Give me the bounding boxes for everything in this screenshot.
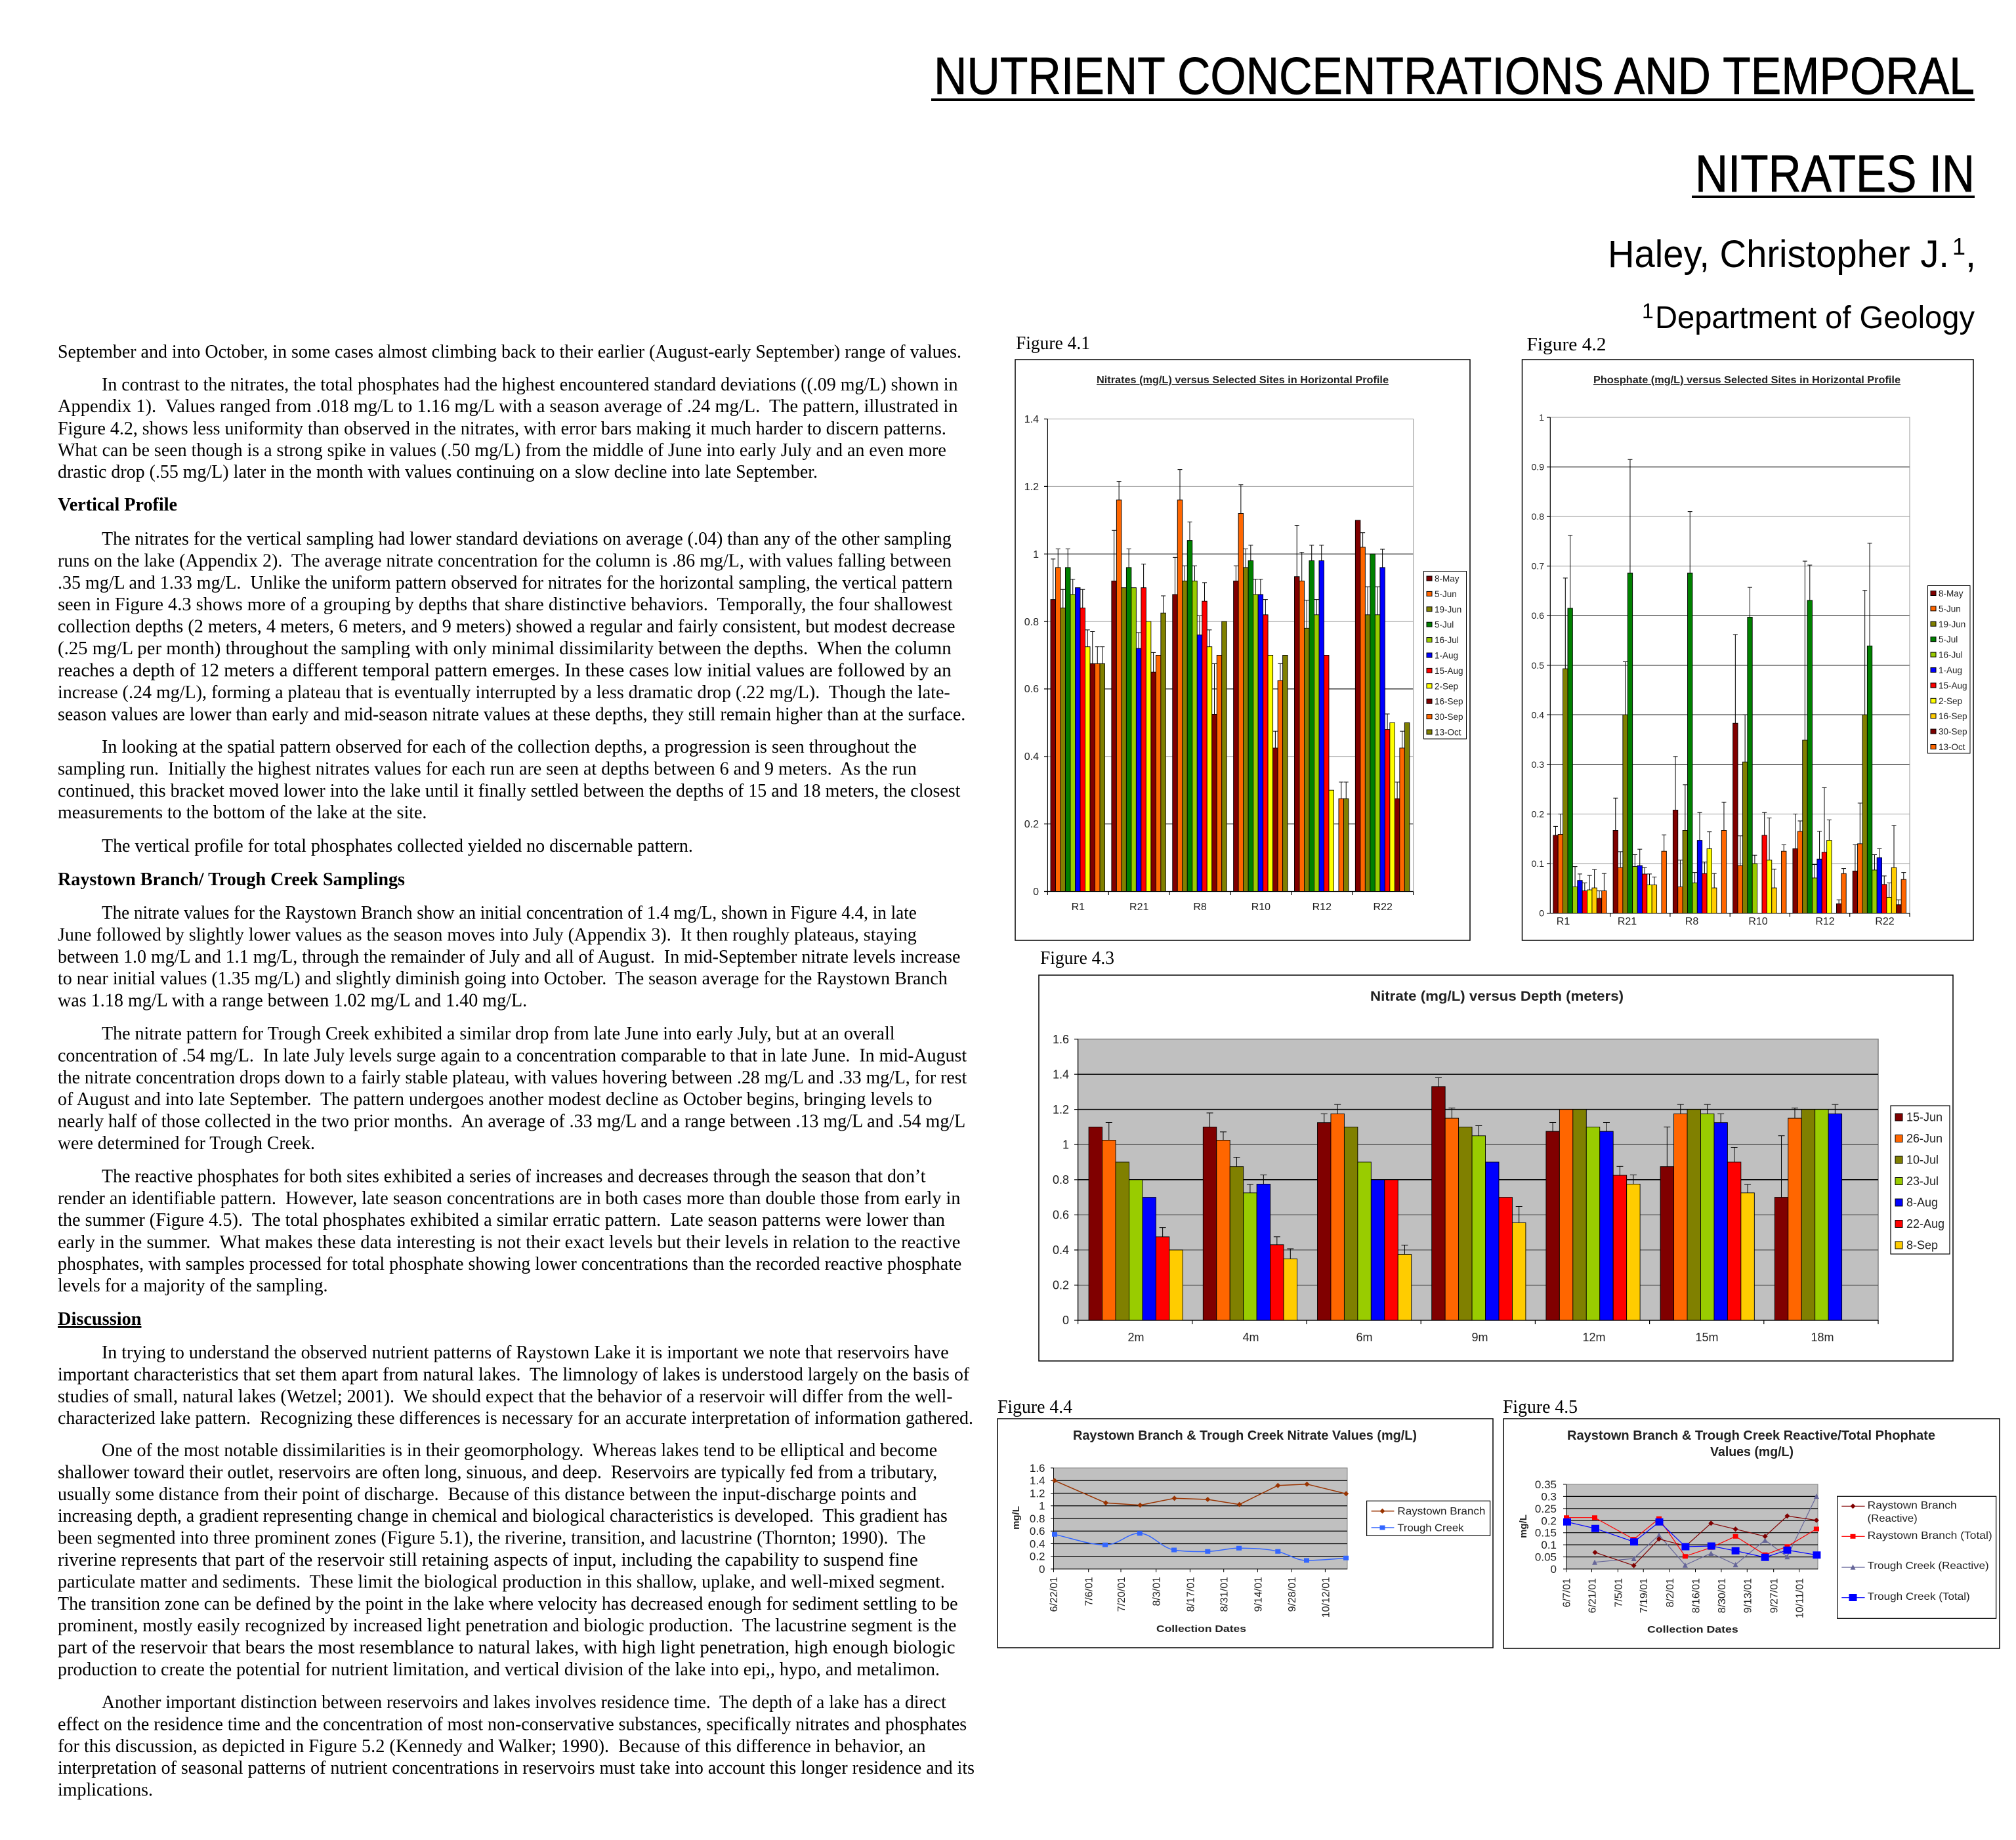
paragraph: total phosphates: What can be seen though is a strong spike in values (.50 mg/L) from the middle of June into early July and an even more: [58, 440, 946, 461]
bars: 18m: [1774, 1104, 1842, 1320]
x axis labels: [1072, 902, 1393, 913]
legend: 2-Sep: [1435, 681, 1458, 691]
paragraph: vertical nitrates: The nitrates for the vertical sampling had lower standard deviations on average (.04) than any of the other sampling: [102, 529, 952, 549]
bars: 6m: [1318, 1104, 1412, 1320]
x axis date labels: 6/7/01: [1562, 1578, 1573, 1607]
plot area and grid: 0.6: [1030, 1525, 1045, 1537]
legend: 16-Jul: [1939, 650, 1963, 660]
x axis labels: R1: [1072, 902, 1085, 913]
line: Raystown Branch reactive: [1592, 1513, 1819, 1568]
figure 4.3 label: Figure 4.3: [1040, 948, 1114, 969]
y axis title: mg/L: [1011, 1506, 1022, 1530]
bars: R1: [1051, 549, 1105, 891]
paragraph: spatial pattern: In looking at the spatial pattern observed for each of the collection depths, a progression is seen throughout the: [102, 737, 917, 757]
paragraph: residence time: Another important distinction between reservoirs and lakes involves residence time. The depth of a lake has a direct: [102, 1692, 946, 1713]
paragraph: reactive phosphates: the summer (Figure 4.5). The total phosphates exhibited a similar erratic pattern. Late season patterns were lower than: [58, 1210, 945, 1230]
x axis date labels: 10/12/01: [1320, 1577, 1332, 1618]
author: ,: [1965, 233, 1976, 276]
bars: R1: [1553, 535, 1606, 913]
legend: 1-Aug: [1939, 665, 1962, 675]
paragraph: vertical nitrates: (.25 mg/L per month) throughout the sampling with only minimal dissimilarity between the depths. When the column: [58, 638, 952, 659]
paragraph: spatial pattern: [58, 737, 961, 823]
plot area and grid: 0.05: [1535, 1551, 1557, 1564]
x axis date labels: 9/27/01: [1769, 1578, 1780, 1613]
paragraph: vertical nitrates: .35 mg/L and 1.33 mg/L. Unlike the uniform pattern observed for nitrates for the horizontal sampling, the vertical pattern: [58, 573, 953, 593]
x axis date labels: 6/21/01: [1587, 1578, 1599, 1613]
author: 1: [1952, 233, 1965, 260]
bars: R12: [1793, 561, 1846, 913]
x axis labels: R12: [1312, 902, 1332, 913]
plot area and grid: 1: [1062, 1138, 1069, 1151]
paragraph: residence time: for this discussion, as depicted in Figure 5.2 (Kennedy and Walker; 1990). Because of this difference in behavior, an: [58, 1736, 925, 1757]
legend: 16-Sep: [1939, 711, 1967, 721]
plot area and grid: 0.35: [1535, 1478, 1557, 1491]
legend: 30-Sep: [1435, 712, 1463, 722]
y axis and grid: 0.4: [1024, 751, 1039, 763]
paragraph: geomorphology: been segmented into three prominent zones (Figure 5.1), the riverine, transition, and lacustrine (Thornton; 1990). The: [58, 1528, 925, 1549]
x axis date labels: 10/11/01: [1795, 1578, 1806, 1618]
plot area and grid: 0.8: [1030, 1513, 1045, 1525]
paragraph: total phosphates: In contrast to the nitrates, the total phosphates had the highest encountered standard deviations ((.09 mg/L) shown in: [102, 375, 958, 395]
paragraph: geomorphology: The transition zone can be defined by the point in the lake where velocity has decreased enough for sediment settling to be: [58, 1594, 958, 1614]
legend: 5-Jul: [1435, 620, 1454, 630]
x axis date labels: 8/16/01: [1690, 1578, 1702, 1613]
legend: 8-Aug: [1906, 1196, 1938, 1209]
legend: [1367, 1501, 1490, 1536]
x axis labels: 4m: [1242, 1331, 1259, 1344]
plot area and grid: 1.2: [1030, 1487, 1045, 1500]
plot area and grid: 0.4: [1053, 1244, 1069, 1257]
legend: 23-Jul: [1906, 1175, 1939, 1188]
x axis date labels: 7/5/01: [1613, 1578, 1624, 1607]
paragraph: vertical nitrates: seen in Figure 4.3 shows more of a grouping by depths that share distinctive behaviors. Temporally, the four shallowest: [58, 595, 953, 615]
x axis date labels: 7/6/01: [1084, 1577, 1095, 1606]
x axis labels: R22: [1875, 916, 1895, 927]
line: Trough Creek reactive: [1592, 1494, 1819, 1568]
plot area and grid: 0.8: [1053, 1173, 1069, 1186]
bars: R8: [1173, 470, 1227, 891]
plot area and grid: [1535, 1478, 1818, 1576]
figure 4.4 label: Figure 4.4: [998, 1397, 1072, 1417]
paragraph: vertical nitrates: season values are lower than early and mid-season nitrate values at these depths, they still remain higher than at the surface.: [58, 705, 965, 725]
paragraph: Raystown nitrates: The nitrate values for the Raystown Branch show an initial concentration of 1.4 mg/L, shown in Figure 4.4, in late: [102, 903, 917, 923]
y axis and grid: 0.6: [1024, 684, 1039, 695]
bars: R22: [1853, 543, 1906, 913]
y axis and grid: 0.5: [1532, 660, 1544, 671]
y axis and grid: 1.4: [1024, 414, 1039, 425]
paragraph: reservoirs versus lakes: characterized lake pattern. Recognizing these differences is necessary for an accurate interpretation of information gathered.: [58, 1408, 973, 1429]
legend: 8-Sep: [1906, 1239, 1938, 1252]
legend: [1928, 585, 1970, 753]
plot area and grid: 0.15: [1535, 1527, 1557, 1539]
plot area and grid: [1053, 1033, 1878, 1327]
paragraph: geomorphology: usually some distance from their point of discharge. Because of this distance between the input-discharge points and: [58, 1484, 917, 1505]
x axis date labels: [1049, 1577, 1332, 1618]
x axis labels: R22: [1374, 902, 1393, 913]
bars: 12m: [1546, 1110, 1640, 1320]
chart title: Values (mg/L): [1710, 1445, 1794, 1459]
paragraph: Trough Creek nitrates: concentration of .54 mg/L. In late July levels surge again to a concentration comparable to that in late June. In mid-August: [58, 1045, 967, 1066]
chart title: Phosphate (mg/L) versus Selected Sites in Horizontal Profile: [1593, 375, 1900, 386]
paragraph: Trough Creek nitrates: [58, 1024, 967, 1154]
bars: R10: [1733, 587, 1786, 913]
y axis and grid: 0.4: [1532, 709, 1544, 720]
x axis labels: R1: [1557, 916, 1570, 927]
paragraph: spatial pattern: measurements to the bottom of the lake at the site.: [58, 803, 427, 823]
x axis labels: R10: [1251, 902, 1270, 913]
legend: 19-Jun: [1435, 604, 1461, 614]
legend: 22-Aug: [1906, 1217, 1944, 1230]
paragraph: geomorphology: part of the reservoir that bears the most resemblance to natural lakes, with high light penetration, high enough biologic: [58, 1638, 955, 1658]
plot area and grid: 1.6: [1053, 1033, 1069, 1046]
paragraph: total phosphates: Figure 4.2, shows less uniformity than observed in the nitrates, with error bars making it much harder to discern patterns.: [58, 419, 946, 439]
plot area and grid: 1.6: [1030, 1462, 1045, 1474]
legend: 8-May: [1939, 589, 1964, 598]
heading: discussion: Discussion: [58, 1309, 142, 1329]
x axis date labels: 8/3/01: [1152, 1577, 1163, 1606]
panel: figure 4.4 Raystown and Trough Creek nitrate line chart: [998, 1419, 1493, 1648]
x axis date labels: 8/31/01: [1219, 1577, 1230, 1612]
x axis labels: R21: [1618, 916, 1637, 927]
plot area and grid: 0.2: [1053, 1278, 1069, 1291]
x axis title: Collection Dates: [1647, 1624, 1738, 1635]
x axis date labels: [1562, 1578, 1806, 1618]
bars: R10: [1234, 485, 1288, 891]
legend: 15-Jun: [1906, 1110, 1942, 1123]
chart title: Nitrates (mg/L) versus Selected Sites in Horizontal Profile: [1097, 375, 1389, 386]
bars: [1051, 470, 1410, 891]
bars: 15m: [1660, 1104, 1754, 1320]
figure 4.5 label: Figure 4.5: [1503, 1397, 1578, 1417]
x axis labels: R12: [1815, 916, 1835, 927]
y axis and grid: 0.8: [1024, 617, 1039, 628]
heading: vertical profile: Vertical Profile: [58, 495, 177, 515]
x axis date labels: 7/20/01: [1116, 1577, 1127, 1612]
paragraph: geomorphology: One of the most notable dissimilarities is in their geomorphology. Whereas lakes tend to be elliptical and become: [102, 1440, 937, 1461]
chart title: Nitrate (mg/L) versus Depth (meters): [1370, 989, 1624, 1004]
paragraph: reservoirs versus lakes: In trying to understand the observed nutrient patterns of Raystown Lake it is important we note that reservoirs have: [102, 1343, 949, 1363]
line: Raystown Branch total: [1564, 1515, 1819, 1558]
plot area and grid: 0.6: [1053, 1209, 1069, 1222]
legend: 16-Sep: [1435, 697, 1463, 707]
bars: R21: [1112, 482, 1166, 891]
plot area and grid: 0: [1039, 1563, 1045, 1576]
paragraph: reactive phosphates: phosphates, with samples processed for total phosphate showing lower concentrations than the recorded reactive phosphate: [58, 1254, 961, 1274]
paragraph: Raystown nitrates: was 1.18 mg/L with a range between 1.02 mg/L and 1.40 mg/L.: [58, 991, 527, 1011]
bars: R21: [1613, 459, 1666, 913]
plot area and grid: 0.3: [1541, 1490, 1557, 1503]
paragraph: vertical phosphates: The vertical profile for total phosphates collected yielded no discernable pattern.: [102, 836, 693, 856]
legend: Raystown Branch: [1868, 1500, 1957, 1511]
y axis and grid: 0.1: [1532, 858, 1544, 869]
paragraph: end of nitrates: September and into October, in some cases almost climbing back to their earlier (August-early September) range of values.: [58, 342, 961, 362]
chart title: Raystown Branch & Trough Creek Nitrate Values (mg/L): [1073, 1429, 1417, 1443]
paragraph: spatial pattern: continued, this bracket moved lower into the lake until it finally settled between the depths of 15 and 18 meters, the closest: [58, 781, 961, 801]
legend: 5-Jun: [1939, 604, 1961, 614]
paragraph: Trough Creek nitrates: of August and into late September. The pattern undergoes another modest decline as October begins, bringing levels to: [58, 1089, 932, 1110]
figure 4.1 label: Figure 4.1: [1016, 333, 1090, 354]
paragraph: reactive phosphates: early in the summer. What makes these data interesting is not their exact levels but their levels in relation to the reactive: [58, 1232, 960, 1253]
x axis labels: 2m: [1127, 1331, 1144, 1344]
y axis and grid: 0: [1033, 887, 1039, 898]
x axis labels: 9m: [1471, 1331, 1488, 1344]
legend: 13-Oct: [1939, 742, 1965, 752]
y axis and grid: 1: [1539, 412, 1544, 423]
paragraph: geomorphology: prominent, mostly easily recognized by increased light penetration and biologic production. The lacustrine segment is the: [58, 1616, 957, 1636]
text column: body text: [58, 342, 975, 1801]
legend: 26-Jun: [1906, 1132, 1942, 1145]
plot area and grid: 0: [1551, 1563, 1557, 1576]
x axis date labels: 8/30/01: [1717, 1578, 1728, 1613]
legend: Trough Creek (Total): [1868, 1591, 1970, 1602]
legend: [1891, 1106, 1950, 1254]
y axis and grid: 1: [1033, 549, 1039, 560]
x axis date labels: 9/13/01: [1742, 1578, 1754, 1613]
plot area and grid: 0.2: [1030, 1551, 1045, 1563]
paragraph: Trough Creek nitrates: The nitrate pattern for Trough Creek exhibited a similar drop from late June into early July, but at an overall: [102, 1024, 895, 1044]
paragraph: Raystown nitrates: to near initial values (1.35 mg/L) and slightly diminish going into October. The season average for the Raystown Branch: [58, 969, 948, 989]
paragraph: total phosphates: [58, 375, 958, 482]
paragraph: residence time: interpretation of seasonal patterns of nutrient concentrations in reservoirs must take into account this longer residence and its: [58, 1758, 975, 1778]
paragraph: total phosphates: Appendix 1). Values ranged from .018 mg/L to 1.16 mg/L with a season average of .24 mg/L. The pattern, illustrated in: [58, 396, 958, 417]
y axis and grid: 0.7: [1532, 561, 1544, 572]
y axis and grid: 0.9: [1532, 462, 1544, 472]
chart title: Raystown Branch & Trough Creek Reactive/Total Phophate: [1567, 1429, 1935, 1443]
paragraph: reactive phosphates: levels for a majority of the sampling.: [58, 1276, 328, 1296]
legend: 30-Sep: [1939, 727, 1967, 737]
panel: figure 4.3 nitrate versus depth bar chart: [1039, 975, 1953, 1361]
paragraph: Raystown nitrates: [58, 903, 960, 1011]
x axis date labels: 9/14/01: [1253, 1577, 1264, 1612]
legend: Trough Creek: [1397, 1522, 1464, 1534]
bars: R12: [1294, 525, 1349, 891]
paragraph: geomorphology: increasing depth, a gradient representing change in chemical and biological characteristics is developed. This gradient has: [58, 1506, 948, 1526]
paragraph: reactive phosphates: render an identifiable pattern. However, late season concentrations are in both cases more than double those from early in: [58, 1188, 960, 1209]
y axis and grid: [1024, 414, 1414, 898]
bars: [1553, 459, 1906, 913]
paragraph: residence time: [58, 1692, 975, 1801]
paragraph: geomorphology: riverine represents that part of the reservoir still retaining aspects of input, including the capability to suspend fine: [58, 1550, 918, 1570]
author: Haley, Christopher J.: [1608, 233, 1949, 276]
legend: Raystown Branch (Total): [1868, 1530, 1992, 1541]
paragraph: Raystown nitrates: between 1.0 mg/L and 1.1 mg/L, through the remainder of July and all of August. In mid-September nitrate levels increase: [58, 947, 960, 967]
paragraph: vertical nitrates: [58, 529, 965, 725]
bars: 2m: [1089, 1122, 1183, 1320]
legend: 5-Jul: [1939, 635, 1958, 644]
legend: [1838, 1496, 1996, 1618]
paragraph: Trough Creek nitrates: the nitrate concentration drops down to a fairly stable plateau, with values hovering between .28 mg/L and .33 mg/L, for rest: [58, 1068, 967, 1088]
plot area and grid: 1.4: [1053, 1068, 1069, 1081]
paragraph: residence time: effect on the residence time and the concentration of most non-conservative substances, specifically nitrates and phosphates: [58, 1714, 967, 1734]
chart title: [1567, 1429, 1935, 1459]
heading: Raystown Branch / Trough Creek: Raystown Branch/ Trough Creek Samplings: [58, 869, 405, 890]
bars: 4m: [1203, 1113, 1297, 1320]
x axis labels: 18m: [1811, 1331, 1834, 1344]
paragraph: reactive phosphates: [58, 1167, 961, 1296]
plot area and grid: 0.4: [1030, 1538, 1045, 1550]
x axis labels: 12m: [1582, 1331, 1606, 1344]
paragraph: Raystown nitrates: June followed by slightly lower values as the season moves into July (Appendix 3). It then roughly plateaus, staying: [58, 925, 917, 945]
x axis title: Collection Dates: [1156, 1623, 1246, 1635]
legend: 15-Aug: [1939, 680, 1967, 690]
legend: 2-Sep: [1939, 696, 1962, 706]
plot area and grid: 0.1: [1541, 1539, 1557, 1551]
paragraph: vertical nitrates: increase (.24 mg/L), forming a plateau that is eventually interrupted by a less dramatic drop (.22 mg/L). Though the late-: [58, 682, 950, 703]
x axis date labels: 6/22/01: [1049, 1577, 1060, 1612]
x axis labels: R8: [1193, 902, 1207, 913]
x axis labels: 15m: [1695, 1331, 1719, 1344]
plot area and grid: 1: [1039, 1500, 1045, 1513]
legend: 15-Aug: [1435, 666, 1463, 676]
paragraph: geomorphology: production to create the potential for nutrient limitation, and vertical division of the lake into epi,, hypo, and metalimon.: [58, 1660, 940, 1680]
title: NITRATES IN: [1695, 144, 1975, 203]
x axis labels: R21: [1129, 902, 1148, 913]
legend: 5-Jun: [1435, 589, 1457, 599]
y axis title: mg/L: [1518, 1515, 1529, 1538]
plot area and grid: 0: [1062, 1314, 1069, 1327]
legend: 8-May: [1435, 574, 1460, 584]
legend: Trough Creek (Reactive): [1868, 1560, 1989, 1572]
x axis date labels: 8/2/01: [1665, 1578, 1676, 1607]
paragraph: residence time: implications.: [58, 1780, 153, 1801]
plot area and grid: 1.4: [1030, 1474, 1045, 1487]
legend: [1424, 571, 1466, 739]
figure 4.2 label: Figure 4.2: [1526, 335, 1606, 355]
bars: R8: [1673, 512, 1727, 913]
legend: 13-Oct: [1435, 727, 1461, 738]
plot area and grid: 1.2: [1053, 1103, 1069, 1116]
paragraph: vertical nitrates: collection depths (2 meters, 4 meters, 6 meters, and 9 meters) showed a regular and fairly consistent, but modest decrease: [58, 617, 956, 637]
legend: 1-Aug: [1435, 651, 1458, 660]
paragraph: reservoirs versus lakes: important characteristics that set them apart from natural lakes. The limnology of lakes is understood largely on the basis of: [58, 1364, 970, 1385]
x axis date labels: 9/28/01: [1287, 1577, 1298, 1612]
paragraph: reservoirs versus lakes: studies of small, natural lakes (Wetzel; 2001). We should expect that the behavior of a reservoir will differ from the well-: [58, 1387, 953, 1407]
bars: 9m: [1432, 1077, 1526, 1320]
y axis and grid: 0.8: [1532, 511, 1544, 522]
paragraph: geomorphology: shallower toward their outlet, reservoirs are often long, sinuous, and deep. Reservoirs are typically fed from a tributary,: [58, 1462, 937, 1482]
legend: 10-Jul: [1906, 1154, 1939, 1167]
legend: Raystown Branch: [1397, 1506, 1485, 1517]
paragraph: vertical nitrates: runs on the lake (Appendix 2). The average nitrate concentration for the column is .86 mg/L, with values falling between: [58, 551, 952, 571]
paragraph: reservoirs versus lakes: [58, 1343, 973, 1429]
y axis and grid: 0: [1539, 908, 1544, 919]
y axis and grid: [1532, 412, 1910, 919]
affiliation: Department of Geology: [1655, 301, 1975, 335]
x axis labels: R8: [1685, 916, 1698, 927]
panel: figure 4.2 phosphate bar chart: [1522, 360, 1973, 940]
paragraph: Trough Creek nitrates: nearly half of those collected in the two prior months. An average of .33 mg/L and a range between .13 mg/L and .54 mg/L: [58, 1112, 965, 1131]
x axis labels: [1557, 916, 1895, 927]
line: Raystown Branch: [1052, 1478, 1349, 1508]
plot area and grid: 0.2: [1541, 1515, 1557, 1527]
paragraph: spatial pattern: sampling run. Initially the highest nitrates values for each run are seen at depths between 6 and 9 meters. As the run: [58, 759, 917, 780]
y axis and grid: 0.3: [1532, 759, 1544, 770]
title: [931, 47, 1975, 203]
x axis labels: R10: [1748, 916, 1768, 927]
y axis and grid: 0.2: [1024, 819, 1039, 830]
x axis date labels: 7/19/01: [1639, 1578, 1650, 1613]
y axis and grid: 0.6: [1532, 610, 1544, 621]
affiliation: 1: [1642, 299, 1654, 323]
x axis date labels: 8/17/01: [1185, 1577, 1196, 1612]
paragraph: reactive phosphates: The reactive phosphates for both sites exhibited a series of increases and decreases through the season that don’t: [102, 1167, 926, 1186]
legend: 19-Jun: [1939, 619, 1965, 629]
y axis and grid: 1.2: [1024, 482, 1039, 493]
paragraph: Trough Creek nitrates: were determined for Trough Creek.: [58, 1133, 315, 1154]
panel: figure 4.5 reactive and total phosphate line chart: [1503, 1419, 2000, 1648]
legend: (Reactive): [1868, 1513, 1918, 1524]
plot area and grid: [1030, 1462, 1347, 1576]
plot area and grid: 0.25: [1535, 1503, 1557, 1515]
bars: [1089, 1077, 1842, 1320]
line: Trough Creek total: [1563, 1518, 1820, 1561]
line: Trough Creek: [1052, 1531, 1349, 1563]
panel: figure 4.1 nitrates bar chart: [1015, 360, 1470, 940]
paragraph: total phosphates: drastic drop (.55 mg/L) later in the month with values continuing on a slow decline into late September.: [58, 462, 818, 482]
y axis and grid: 0.2: [1532, 808, 1544, 819]
paragraph: vertical nitrates: reaches a depth of 12 meters a different temporal pattern emerges. In these cases low initial values are followed by an: [58, 660, 952, 680]
legend: 16-Jul: [1435, 635, 1459, 645]
bars: R22: [1355, 520, 1410, 891]
paragraph: geomorphology: particulate matter and sediments. These limit the biological production in this shallow, uplake, and well-mixed segment.: [58, 1572, 945, 1592]
paragraph: geomorphology: [58, 1440, 958, 1680]
x axis labels: 6m: [1356, 1331, 1373, 1344]
x axis labels: [1127, 1331, 1834, 1344]
